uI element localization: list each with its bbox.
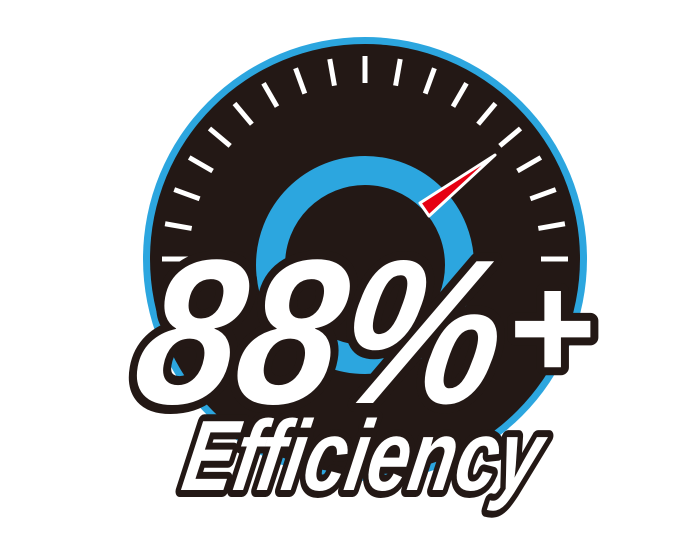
needle — [420, 155, 495, 216]
dark dial face — [150, 44, 580, 474]
outer blue ring — [143, 37, 587, 481]
subtitle: Efficiency: Efficiency — [176, 401, 555, 512]
headline: 88%+: 88% — [121, 216, 524, 447]
tick marks — [162, 56, 568, 294]
inner blue arc — [270, 170, 460, 360]
gauge dial — [143, 37, 587, 481]
plus sign: + — [506, 243, 594, 411]
